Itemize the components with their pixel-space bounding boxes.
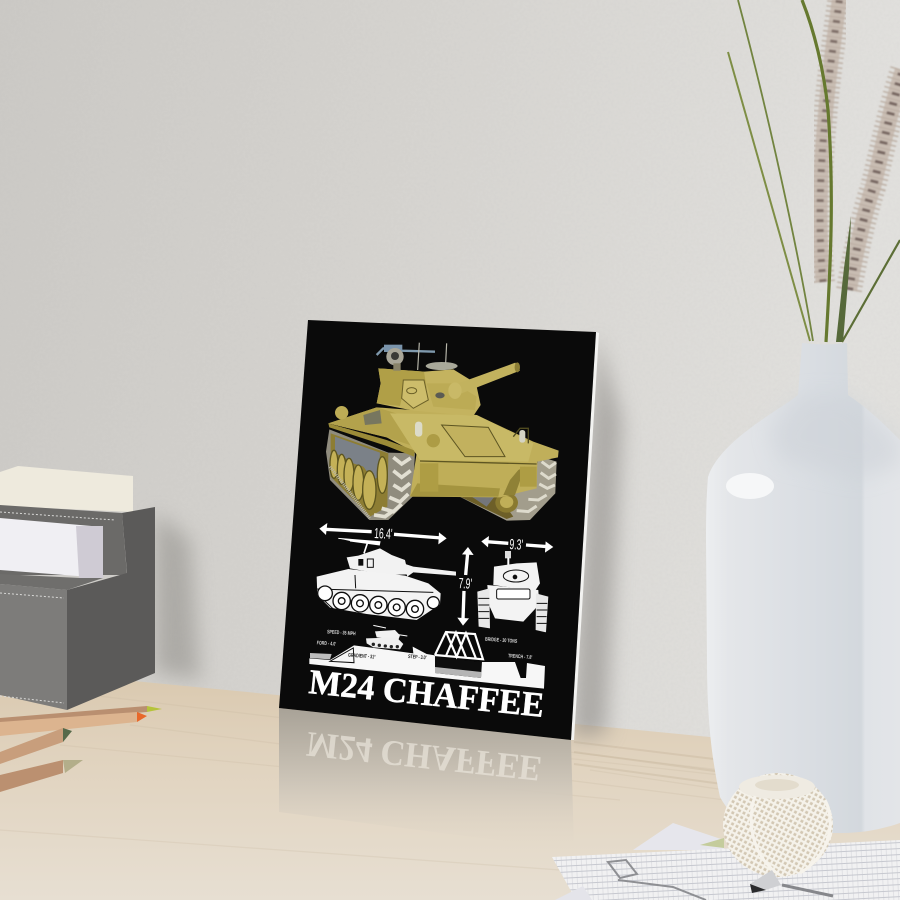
box side face (67, 507, 155, 710)
hull (328, 406, 559, 497)
board edge (571, 332, 599, 740)
bridge label: BRIDGE - 30 TONS (485, 636, 518, 644)
machine gun and antennas (377, 343, 447, 371)
tank illustration (326, 343, 559, 521)
height arrow 7.9': 7.9' (458, 575, 472, 592)
width arrow 9.3' (481, 536, 553, 553)
bridge (435, 632, 483, 678)
width arrow 9.3': 9.3' (509, 536, 523, 553)
box inside floor (0, 574, 103, 590)
white card stack (0, 518, 103, 578)
colored pencils (0, 706, 162, 792)
mobility specs (309, 625, 545, 689)
left track and road wheels (326, 429, 415, 520)
gradient label: GRADIENT - 31° (348, 652, 376, 660)
plume right (849, 70, 900, 290)
speed label: SPEED - 35 MPH (327, 629, 356, 636)
organizer wall shadow (155, 512, 200, 680)
dimension diagrams (317, 523, 553, 632)
board reflection: M24 CHAFFEE (305, 724, 543, 789)
length arrow 16.4' (319, 523, 447, 544)
step label: STEP - 3.0' (408, 653, 427, 660)
twine ball (723, 773, 833, 877)
cream card (0, 466, 133, 512)
tank side view (317, 538, 456, 620)
small tank (366, 625, 407, 649)
gun barrel (448, 362, 520, 399)
tank front view (477, 551, 548, 632)
black art board (279, 320, 596, 740)
plant stems and plumes (728, 0, 900, 342)
paper sheets (552, 823, 900, 900)
ford label: FORD - 4.0' (317, 640, 336, 647)
white vase (706, 343, 900, 833)
box stitching (0, 512, 115, 703)
plume left (820, 0, 840, 282)
right track (458, 456, 557, 521)
length arrow 16.4': 16.4' (374, 525, 393, 543)
green stems (728, 52, 810, 341)
trench label: TRENCH - 7.8' (508, 653, 532, 660)
desk surface (0, 668, 900, 900)
terrain strip (309, 645, 545, 689)
height arrow 7.9' (457, 547, 474, 626)
organizer box and cards (0, 466, 155, 710)
board reflection (279, 708, 574, 850)
organizer back panel (0, 505, 127, 575)
title M24 CHAFFEE: M24 CHAFFEE (307, 662, 546, 725)
turret (377, 362, 481, 416)
box front face (0, 584, 67, 710)
paper clip and binder clip (608, 860, 833, 900)
board cast shadow (571, 334, 622, 738)
